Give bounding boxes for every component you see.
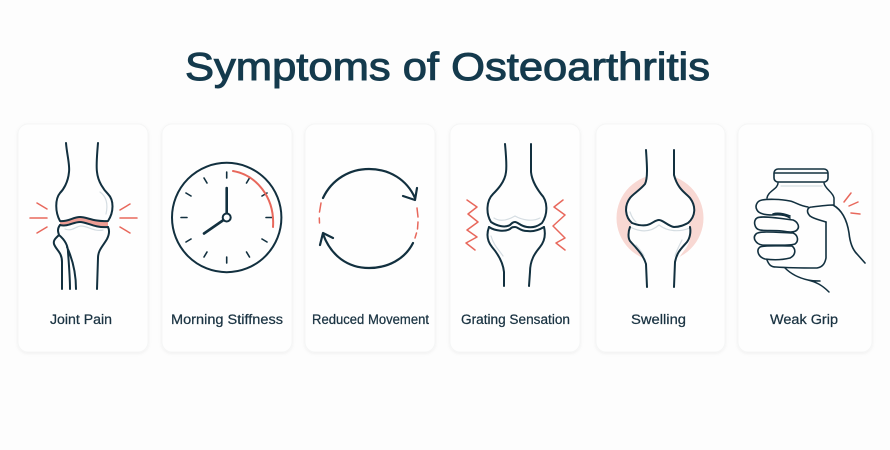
icon: hand gripping jar: [754, 169, 865, 292]
label: Morning Stiffness: [171, 312, 283, 327]
icon: swollen knee: [616, 150, 704, 287]
label: Grating Sensation: [461, 312, 570, 327]
panel: joint pain: [18, 124, 148, 352]
label: Swelling: [631, 312, 686, 327]
title: Symptoms of Osteoarthritis: [185, 46, 710, 89]
panel: grating sensation: [450, 124, 580, 352]
icon: knee with pain rays: [30, 143, 137, 289]
panel: reduced movement: [305, 124, 435, 352]
panel: swelling: [596, 124, 725, 352]
icon: knee with zigzags: [466, 144, 565, 286]
label: Reduced Movement: [312, 312, 429, 327]
icon: clock: [172, 163, 281, 272]
panel: weak grip: [738, 124, 872, 352]
label: Joint Pain: [50, 312, 112, 327]
icon: circular arrows: [319, 169, 418, 268]
label: Weak Grip: [770, 312, 838, 327]
panel: morning stiffness: [162, 124, 292, 352]
